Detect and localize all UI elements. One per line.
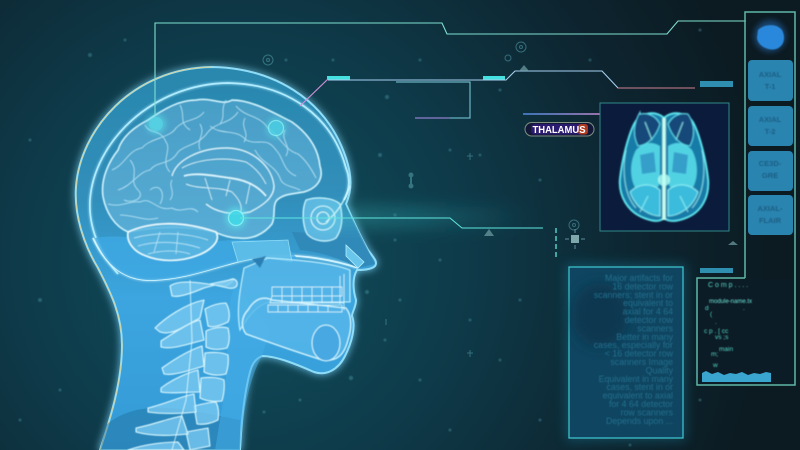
vertebra 2: [206, 327, 229, 349]
text panel: equivalent to axial: [603, 391, 673, 401]
jaw and teeth: [238, 256, 351, 361]
cheek and nose shade: [292, 204, 375, 268]
axial brain outline: [620, 112, 708, 221]
side button: CE3D-GRE: GRE: [762, 171, 778, 180]
terminal panel: c p . [ cc: [704, 328, 729, 335]
inset panel: axial brain: [600, 103, 729, 231]
text panel: < 16 detector row: [605, 349, 674, 359]
cerebellum: [128, 224, 217, 260]
text panel: scanners: [637, 323, 674, 333]
side button: AXIAL T-1: AXIAL: [759, 70, 782, 79]
skull base line: [93, 238, 358, 280]
text panel: Depends upon ...: [606, 416, 673, 426]
text panel: scanners Image: [610, 357, 673, 367]
side button: CE3D-GRE: [748, 151, 793, 191]
side button: AXIAL T-1: T-1: [765, 82, 775, 91]
terminal panel: (: [710, 311, 713, 318]
vertebra 3: [204, 352, 228, 375]
vertebra 4: [200, 377, 224, 401]
side button: AXIAL T-2: [748, 106, 793, 146]
chin: [312, 325, 340, 361]
text panel: Better in many: [616, 332, 674, 342]
lower skull shade: [95, 236, 300, 280]
text panel: cases, especially for: [594, 340, 673, 350]
text panel: Major artifacts for: [605, 273, 673, 283]
dashed connector: [555, 228, 557, 258]
side button: AXIAL T-2: T-2: [765, 127, 775, 136]
thalamus callout: [523, 114, 640, 145]
brain folds: [108, 100, 316, 219]
vertebra 6: [186, 428, 210, 450]
upper connector line: [300, 71, 695, 118]
glowing node: thalamus: [225, 207, 247, 229]
text panel: Quality: [646, 365, 674, 375]
spinal column line: [172, 280, 192, 450]
vertebra 1: [205, 303, 229, 327]
terminal panel: vs ;s: [715, 334, 729, 341]
text panel: for 4 64 detector: [609, 399, 673, 409]
side button: CE3D-GRE: CE3D-: [759, 159, 782, 168]
temple bone: [232, 240, 292, 262]
triangle markers: [484, 65, 738, 245]
glowing node: frontal: [146, 114, 166, 134]
terminal activity bars: [702, 371, 771, 382]
right side frame: [697, 12, 795, 385]
text panel: cases, stent in or: [606, 382, 673, 392]
terminal panel: main: [719, 346, 733, 353]
side button: AXIAL-FLAIR: [748, 195, 793, 235]
atlas: [170, 279, 234, 296]
spine canal shade: [215, 285, 270, 450]
terminal panel: w: [712, 362, 718, 369]
text panel: Equivalent in many: [599, 374, 674, 384]
side button: AXIAL-FLAIR: AXIAL-: [758, 204, 783, 213]
teal beam: [240, 207, 543, 228]
teeth: [268, 274, 344, 312]
terminal panel: .: [743, 305, 745, 312]
glowing node: parietal: [266, 118, 286, 138]
terminal panel: module-name.tx: [709, 299, 752, 305]
head silhouette: [76, 67, 376, 450]
side button: AXIAL T-2: AXIAL: [759, 115, 782, 124]
text panel: equivalent to: [623, 298, 673, 308]
thalamus callout: THALAMUS: [532, 125, 586, 136]
text panel: scanners; stent in or: [594, 290, 673, 300]
text panel: detector row: [625, 315, 674, 325]
ear: [303, 186, 350, 241]
text panel: row scanners: [621, 407, 674, 417]
brain: [102, 99, 321, 260]
text panel: [566, 264, 686, 441]
limbic ring: [172, 148, 274, 214]
terminal panel: d: [705, 305, 709, 312]
vertebra 5: [194, 402, 219, 424]
skull outline: [90, 83, 349, 274]
side button: AXIAL-FLAIR: FLAIR: [759, 216, 782, 225]
side button: AXIAL T-1: [748, 60, 793, 101]
terminal panel: [698, 279, 794, 384]
target icons and markers: [263, 42, 632, 357]
lower shoulder shade: [100, 408, 240, 450]
top connector line: [155, 21, 746, 115]
text panel: axial for 4 64: [623, 307, 673, 317]
terminal panel: C o m p . . . .: [708, 282, 748, 289]
text panel: 16 detector row: [612, 281, 674, 291]
status bars: [327, 76, 733, 273]
terminal panel: .: [715, 319, 717, 326]
square marker: [565, 229, 585, 249]
side icon: blob: [754, 20, 786, 52]
terminal panel: m;: [711, 351, 718, 358]
rim highlight: [76, 67, 212, 450]
cervical spine: [128, 279, 237, 450]
